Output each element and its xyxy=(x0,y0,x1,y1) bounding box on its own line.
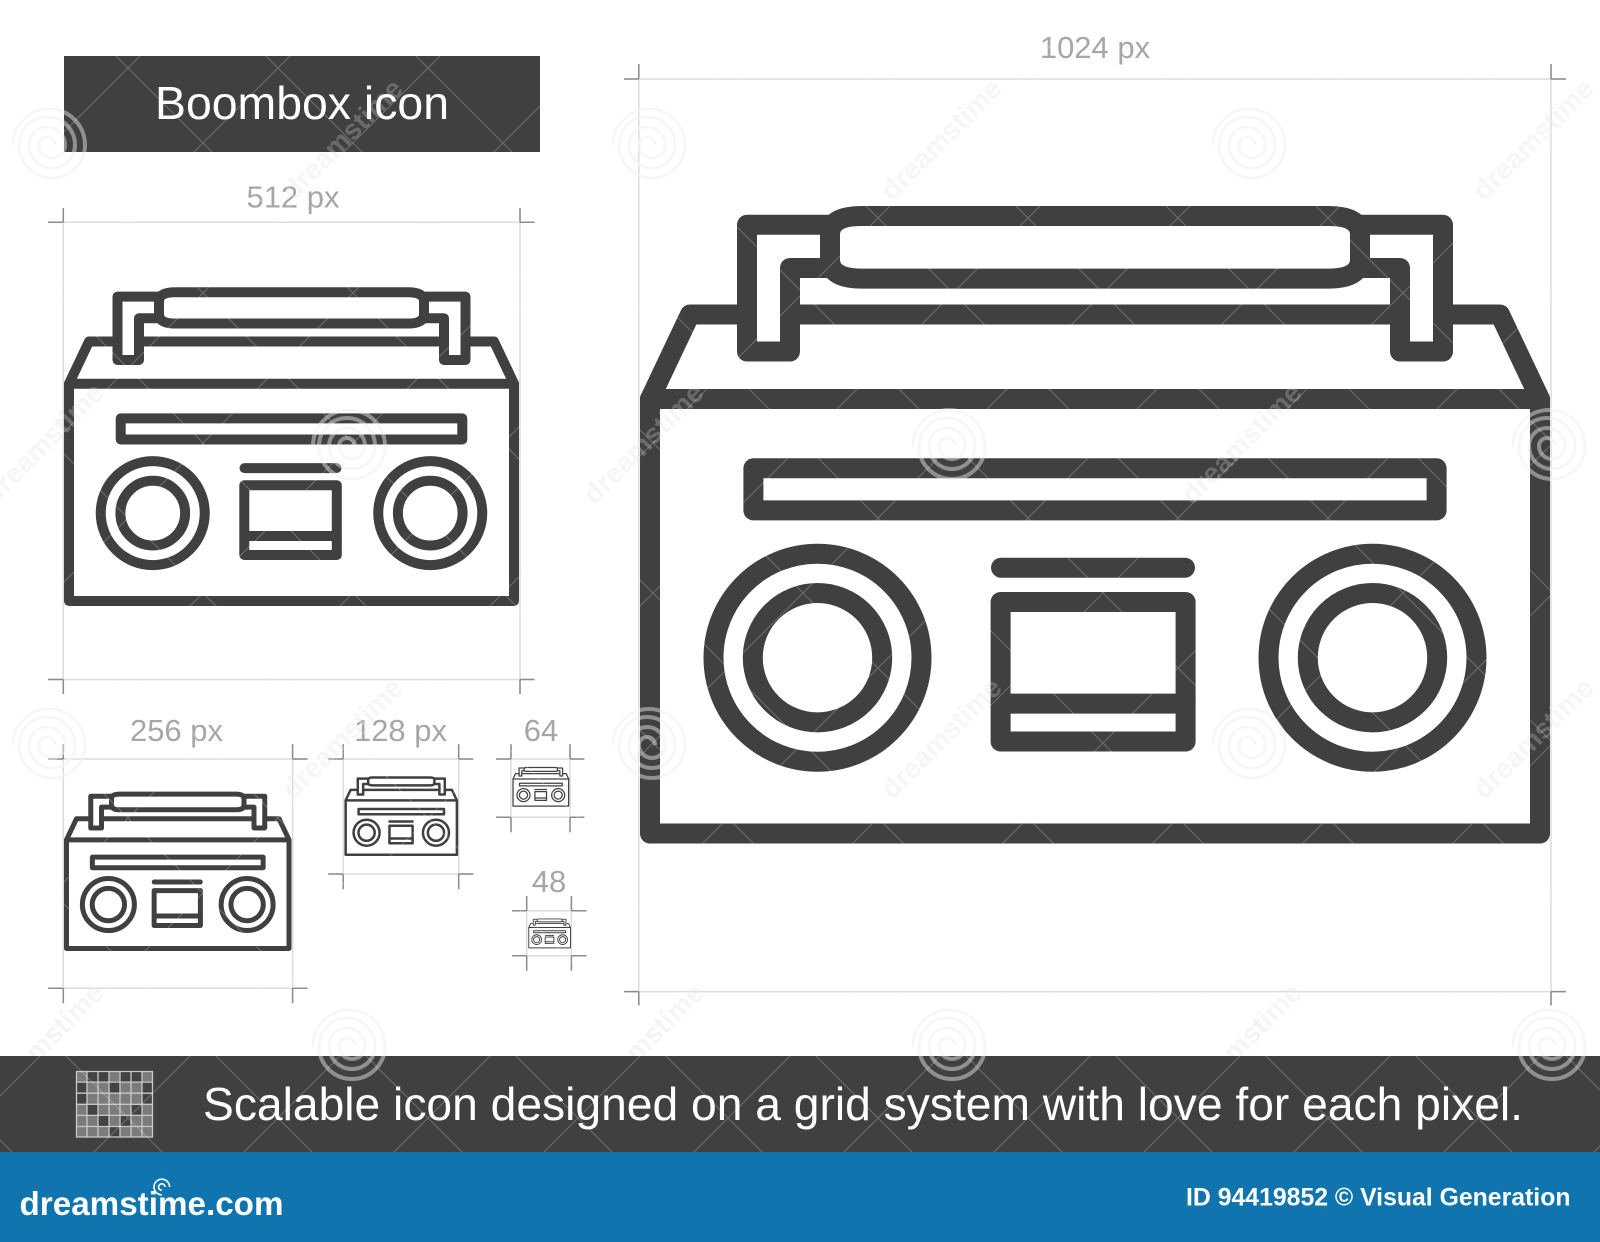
watermark text over dark areas: dreamstime xyxy=(875,672,1008,805)
watermark text over dark areas: dreamstime xyxy=(577,377,710,510)
panel: 64 px size xyxy=(496,713,584,832)
watermark text over dark areas: dreamstime xyxy=(276,672,409,805)
icon: boombox 128 xyxy=(346,778,457,855)
panel: 1024 px size xyxy=(624,30,1566,1006)
label: 48: 48 xyxy=(532,864,566,899)
icon: pixel grid xyxy=(76,1071,153,1138)
ruler: 64 px guides xyxy=(496,744,584,832)
panel: 128 px size xyxy=(328,713,473,889)
watermark spirals over dark areas xyxy=(13,109,1585,1079)
label: 64: 64 xyxy=(524,713,558,748)
watermark text: dreamstime xyxy=(1467,73,1600,206)
ruler: 128 px guides xyxy=(328,744,473,889)
watermark text: dreamstime xyxy=(276,73,409,206)
panel: 256 px size xyxy=(48,713,308,1003)
label: 128 px: 128 px xyxy=(354,713,448,748)
icon: boombox 64 xyxy=(513,768,569,806)
title banner xyxy=(64,56,540,152)
label: 512 px: 512 px xyxy=(246,180,340,215)
ruler: 1024 px guides xyxy=(624,64,1566,1006)
icon: boombox 512 xyxy=(69,292,514,601)
logo: dreamstime.com: dreamstime.com xyxy=(20,1185,284,1222)
ruler: 512 px guides xyxy=(48,208,535,694)
watermark text: dreamstime xyxy=(577,977,710,1110)
watermark text: dreamstime xyxy=(1467,672,1600,805)
dark caption band xyxy=(0,1056,1600,1152)
watermark text over dark areas: dreamstime xyxy=(875,73,1008,206)
watermark spirals on white xyxy=(13,109,1585,1079)
panel: 512 px size xyxy=(48,180,535,694)
title banner: Boombox icon xyxy=(155,77,449,129)
ruler: 48 px guides xyxy=(512,896,586,971)
image id credit: ID 94419852 © Visual Generation xyxy=(1186,1184,1570,1212)
caption text: Scalable icon designed on a grid system with love for each pixel. xyxy=(203,1078,1523,1130)
watermark text: dreamstime xyxy=(577,377,710,510)
watermark text: dreamstime xyxy=(1175,377,1308,510)
blue footer xyxy=(0,1152,1600,1242)
watermark text over dark areas: dreamstime xyxy=(1467,672,1600,805)
watermark text over dark areas xyxy=(64,83,1550,1066)
icon: boombox 256 xyxy=(66,794,289,948)
panel: 48 px size xyxy=(512,864,586,971)
watermark text over dark areas: dreamstime xyxy=(1175,377,1308,510)
label: 256 px: 256 px xyxy=(130,713,224,748)
watermark text over dark areas: dreamstime xyxy=(1175,977,1308,1110)
watermark text: dreamstime xyxy=(1175,977,1308,1110)
watermark text over dark areas: dreamstime xyxy=(577,977,710,1110)
ruler: 256 px guides xyxy=(48,744,308,1003)
icon: logo spiral xyxy=(154,1179,170,1195)
watermark text over dark areas: dreamstime xyxy=(276,73,409,206)
watermark text: dreamstime xyxy=(875,672,1008,805)
watermark text: dreamstime xyxy=(276,672,409,805)
icon: boombox 1024 xyxy=(650,216,1540,834)
watermark text: dreamstime xyxy=(875,73,1008,206)
watermark text over dark areas: dreamstime xyxy=(1467,73,1600,206)
icon: boombox 48 xyxy=(529,919,570,948)
label: 1024 px: 1024 px xyxy=(1040,30,1151,65)
